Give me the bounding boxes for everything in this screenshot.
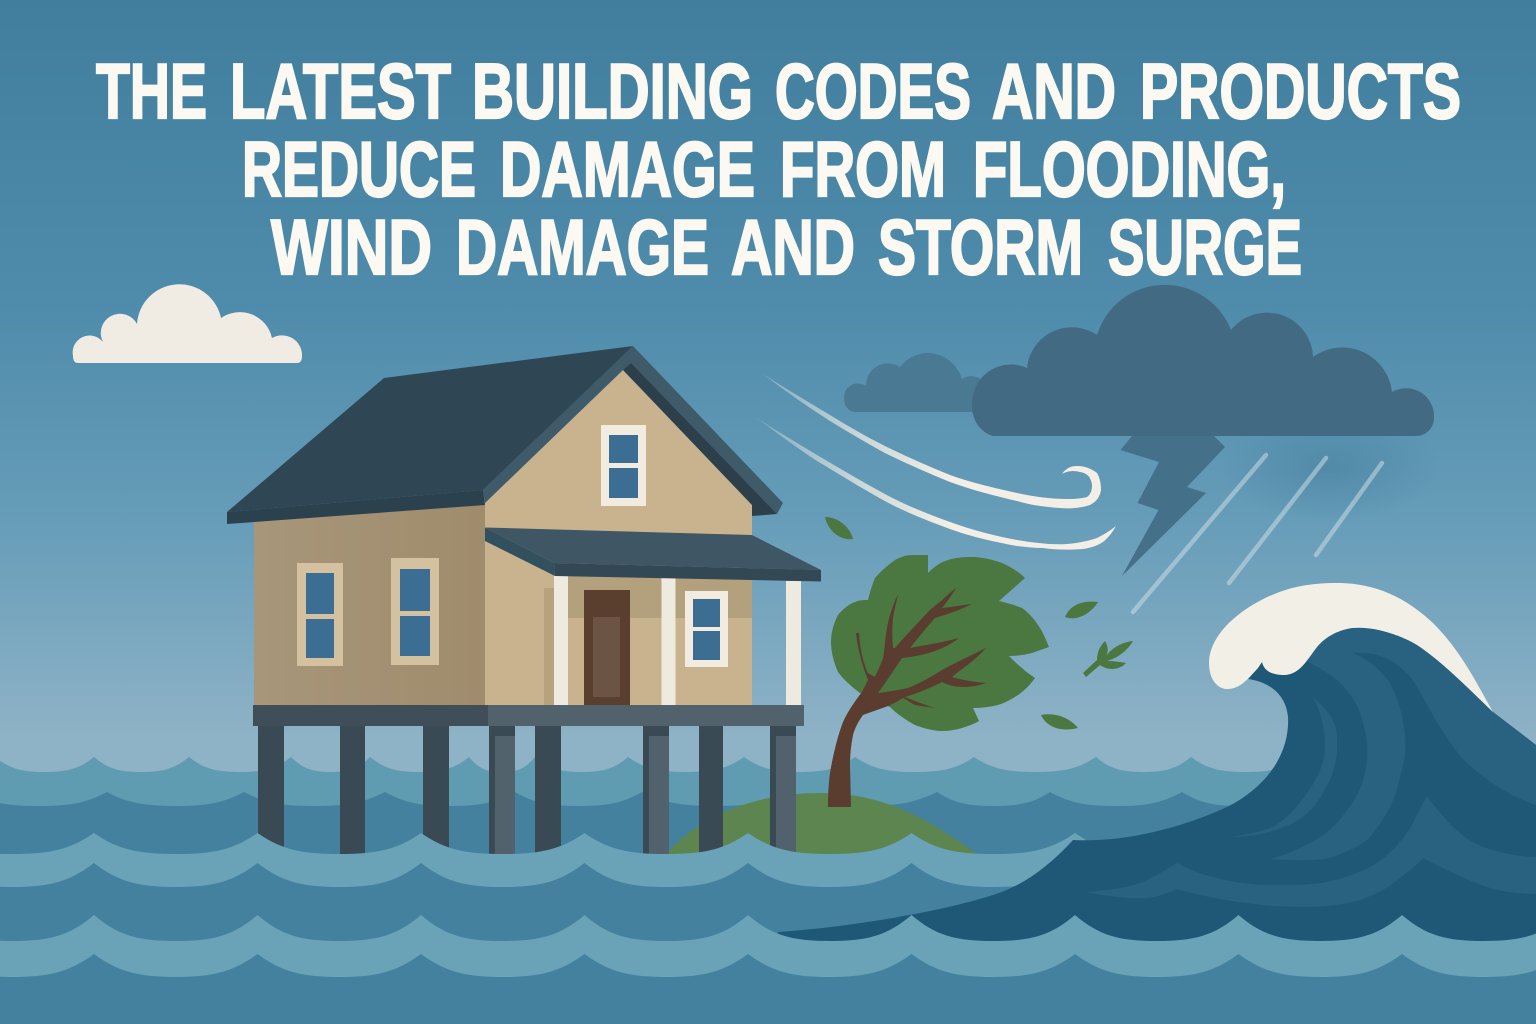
wind gusts: [757, 374, 1116, 550]
title: AND: [992, 47, 1116, 135]
title: CODES: [775, 47, 971, 135]
water: front wave row: [0, 954, 1536, 1024]
water: back wave row: [0, 757, 1300, 1024]
title: LATEST: [230, 47, 451, 135]
tree: [828, 555, 1049, 807]
door: [584, 590, 630, 705]
storm surge wave: [778, 583, 1536, 970]
left wall window two: [391, 558, 439, 665]
porch shadow: [544, 575, 752, 705]
gable rake trim: [483, 346, 783, 516]
house on stilts: [227, 346, 821, 856]
title: DAMAGE: [456, 203, 709, 291]
title: [96, 47, 1461, 291]
cloud: large storm cloud: [972, 285, 1434, 436]
tree canopy: [831, 555, 1049, 731]
title: AND: [731, 203, 855, 291]
rain shadow: [1220, 413, 1440, 523]
wave body: [778, 628, 1536, 970]
title: FLOODING,: [973, 125, 1286, 213]
cloud: white: [73, 284, 302, 363]
left wall window one: [297, 563, 343, 666]
main roof: [227, 346, 633, 512]
wave lower mound: [1087, 796, 1536, 907]
porch roof: [485, 528, 821, 582]
water: fifth wave row: [0, 915, 1536, 1024]
gable wall: [485, 370, 752, 705]
tree trunk and branches: [828, 588, 986, 807]
wave foam crest: [1209, 583, 1493, 712]
title: SURGE: [1108, 203, 1302, 291]
rain streaks: [1133, 455, 1382, 612]
wave middle and upper bands: [1270, 628, 1536, 860]
flying leaves: [825, 517, 1133, 729]
cloud: small dark: [844, 353, 985, 412]
roof fascia: [227, 490, 485, 524]
title: WIND: [271, 203, 432, 291]
upper window: [601, 425, 646, 506]
title: BUILDING: [472, 47, 753, 135]
stilts: [258, 726, 796, 856]
porch window: [685, 591, 728, 667]
title: REDUCE: [242, 125, 476, 213]
title: STORM: [878, 203, 1083, 291]
water: third wave row: [0, 833, 1238, 1024]
water: second wave row: [0, 792, 1300, 1024]
title: FROM: [780, 125, 946, 213]
water: fourth wave row: [0, 863, 1238, 1024]
title: THE: [96, 47, 207, 135]
deck platform: [253, 705, 804, 726]
wave inner crescent: [1230, 697, 1337, 837]
lightning bolt: [1120, 436, 1225, 576]
porch posts: [554, 576, 801, 705]
title: DAMAGE: [500, 125, 755, 213]
left wall: [254, 503, 485, 705]
island: [660, 793, 985, 862]
